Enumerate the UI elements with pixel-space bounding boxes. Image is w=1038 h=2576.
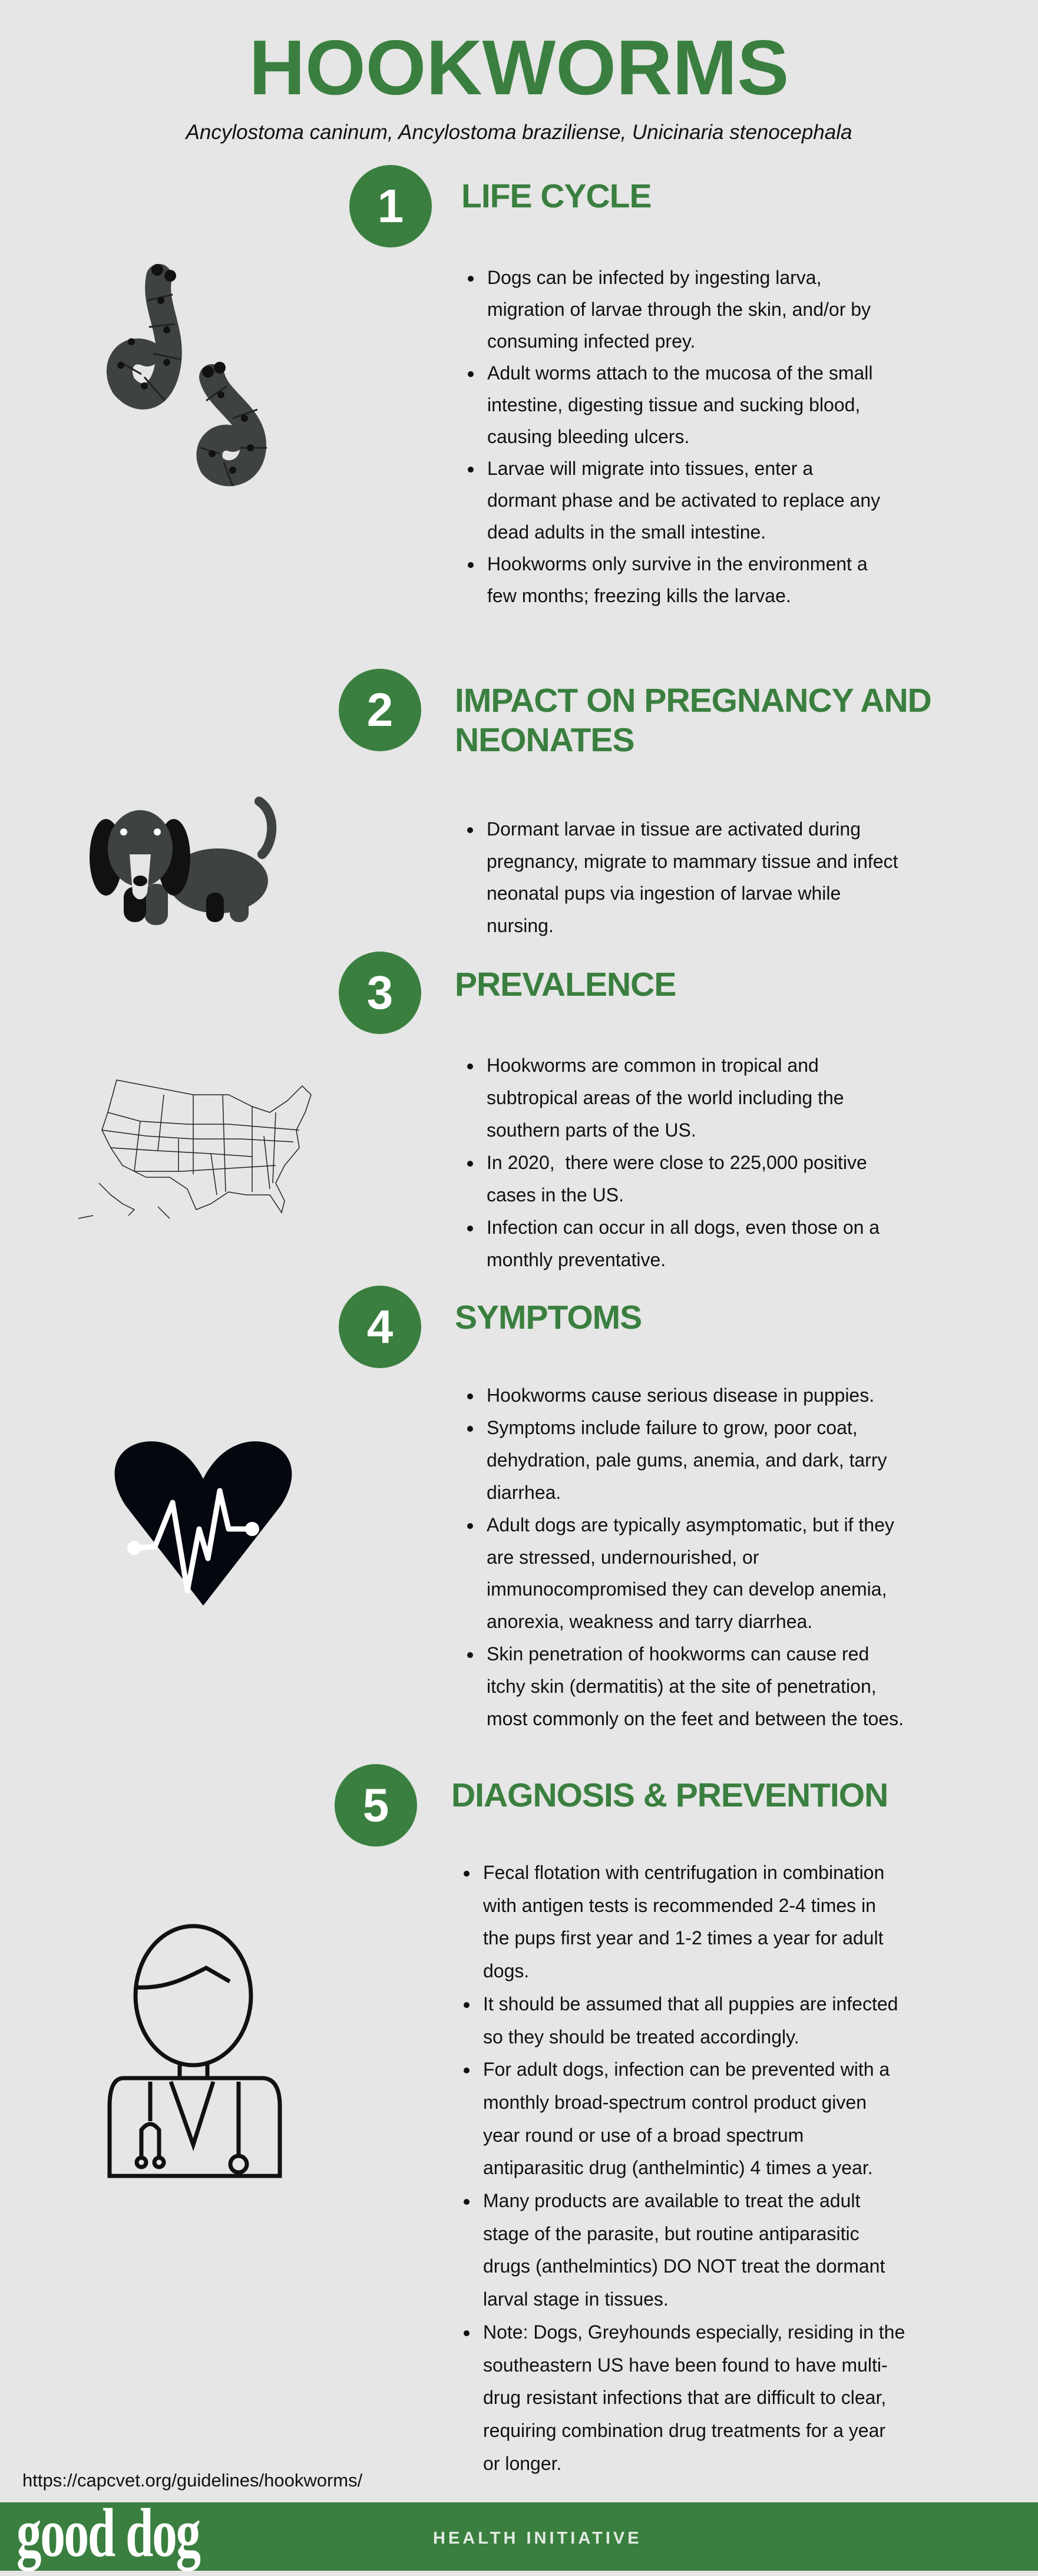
section 3 number [339, 952, 421, 1034]
section 4 bullets: Skin penetration of hookworms can cause red [487, 1643, 869, 1665]
section 3 bullets: Infection can occur in all dogs, even those on a [487, 1217, 880, 1238]
section 1 bullets: few months; freezing kills the larvae. [487, 585, 791, 606]
section 1 number: 1 [378, 180, 404, 232]
section 5 bullets: For adult dogs, infection can be prevented with a [483, 2059, 890, 2080]
section 2 heading: IMPACT ON PREGNANCY AND [455, 682, 931, 719]
section 2 bullets [467, 818, 898, 936]
section 4 bullets: Hookworms cause serious disease in puppies. [487, 1385, 874, 1406]
section 5 bullets: drugs (anthelmintics) DO NOT treat the dormant [483, 2255, 885, 2277]
section 2 bullets: Dormant larvae in tissue are activated during [487, 818, 861, 840]
section 5 bullets: or longer. [483, 2453, 561, 2474]
footer tagline: HEALTH INITIATIVE [433, 2529, 642, 2548]
icon: US map [78, 1079, 312, 1219]
section 3 bullets: monthly preventative. [487, 1249, 666, 1270]
section 4 number [339, 1286, 421, 1368]
section 4 bullets: most commonly on the feet and between the toes. [487, 1708, 904, 1729]
section 5 bullets: drug resistant infections that are difficult to clear, [483, 2387, 886, 2408]
section 1 number [349, 165, 432, 247]
section 3 bullets: cases in the US. [487, 1184, 624, 1206]
section 5 number [335, 1764, 417, 1847]
source url: https://capcvet.org/guidelines/hookworms/ [22, 2470, 362, 2491]
section 4 bullets: dehydration, pale gums, anemia, and dark, tarry [487, 1449, 887, 1471]
section 3 bullets: southern parts of the US. [487, 1119, 696, 1141]
section 1 bullets: migration of larvae through the skin, and/or by [487, 299, 871, 320]
section 5 bullets: Fecal flotation with centrifugation in combination [483, 1862, 884, 1883]
section 5 number: 5 [363, 1779, 389, 1831]
section 4 bullets: immunocompromised they can develop anemia, [487, 1578, 887, 1600]
section 5 bullets: Many products are available to treat the adult [483, 2190, 860, 2211]
section 4 bullets: Adult dogs are typically asymptomatic, but if they [487, 1514, 894, 1535]
footer logo: good dog [16, 2494, 200, 2571]
section 5 bullets [464, 1862, 905, 2474]
section 4 heading: SYMPTOMS [455, 1299, 642, 1336]
section 5 heading: DIAGNOSIS & PREVENTION [451, 1776, 888, 1814]
section 3 bullets [467, 1055, 880, 1270]
section 1 bullets: intestine, digesting tissue and sucking blood, [487, 394, 860, 415]
section 5 bullets: larval stage in tissues. [483, 2288, 669, 2310]
section 4 bullets [467, 1385, 904, 1729]
section 4 bullets: are stressed, undernourished, or [487, 1547, 759, 1568]
section 2 bullets: nursing. [487, 914, 554, 936]
section 1 bullets: Hookworms only survive in the environment a [487, 553, 868, 574]
section 2 bullets: neonatal pups via ingestion of larvae while [487, 883, 841, 904]
section 1 bullets: causing bleeding ulcers. [487, 426, 689, 447]
section 1 bullets: consuming infected prey. [487, 331, 695, 352]
icon: worms [106, 264, 267, 487]
section 2 number [339, 669, 421, 751]
section 5 bullets: antiparasitic drug (anthelmintic) 4 times a year. [483, 2157, 873, 2178]
icon: dog [90, 797, 277, 925]
section 5 bullets: year round or use of a broad spectrum [483, 2125, 804, 2146]
section 5 bullets: Note: Dogs, Greyhounds especially, residing in the [483, 2321, 905, 2343]
section 4 number: 4 [367, 1300, 393, 1353]
section 5 bullets: so they should be treated accordingly. [483, 2026, 799, 2047]
section 2 heading [455, 682, 931, 759]
section 4 bullets: anorexia, weakness and tarry diarrhea. [487, 1611, 812, 1632]
section 5 bullets: stage of the parasite, but routine antiparasitic [483, 2223, 860, 2244]
section 1 bullets: Dogs can be infected by ingesting larva, [487, 267, 821, 288]
section 3 bullets: In 2020, there were close to 225,000 positive [487, 1152, 867, 1173]
footer bar [0, 2502, 1038, 2571]
icon: doctor [107, 1924, 282, 2178]
section 5 bullets: the pups first year and 1-2 times a year for adult [483, 1927, 883, 1948]
section 3 number: 3 [367, 966, 393, 1019]
section 5 bullets: with antigen tests is recommended 2-4 times in [483, 1895, 876, 1916]
section 5 bullets: monthly broad-spectrum control product given [483, 2092, 867, 2113]
section 2 bullets: pregnancy, migrate to mammary tissue and infect [487, 851, 898, 872]
section 1 bullets: dormant phase and be activated to replace any [487, 490, 880, 511]
section 5 bullets: It should be assumed that all puppies are infected [483, 1993, 898, 2014]
section 4 bullets: itchy skin (dermatitis) at the site of penetration, [487, 1676, 877, 1697]
section 3 bullets: Hookworms are common in tropical and [487, 1055, 819, 1076]
section 4 bullets: Symptoms include failure to grow, poor coat, [487, 1417, 858, 1438]
section 3 bullets: subtropical areas of the world including the [487, 1087, 844, 1108]
section 3 heading: PREVALENCE [455, 966, 676, 1003]
section 1 bullets [468, 267, 880, 606]
section 5 bullets: southeastern US have been found to have multi- [483, 2354, 888, 2376]
section 1 bullets: Adult worms attach to the mucosa of the small [487, 362, 873, 384]
section 5 bullets: requiring combination drug treatments for a year [483, 2420, 885, 2441]
section 5 bullets: dogs. [483, 1960, 529, 1981]
section 2 heading: NEONATES [455, 721, 634, 759]
section 2 number: 2 [367, 683, 393, 736]
icon: heart [114, 1441, 292, 1606]
section 1 bullets: Larvae will migrate into tissues, enter a [487, 458, 813, 479]
section 1 heading: LIFE CYCLE [461, 177, 652, 215]
title: HOOKWORMS [249, 24, 789, 111]
subtitle: Ancylostoma caninum, Ancylostoma braziliense, Unicinaria stenocephala [186, 121, 852, 144]
section 1 bullets: dead adults in the small intestine. [487, 521, 766, 543]
section 4 bullets: diarrhea. [487, 1482, 561, 1503]
